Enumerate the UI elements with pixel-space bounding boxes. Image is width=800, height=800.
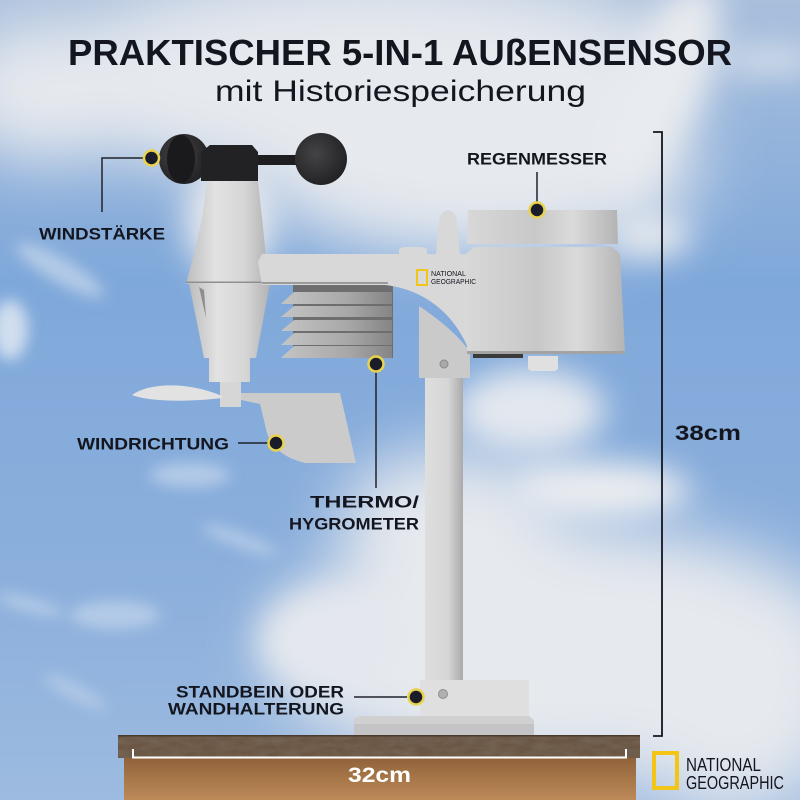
callout: Standbein oder Wandhalterung: WANDHALTERUNG <box>168 700 344 718</box>
support arm <box>258 254 484 378</box>
callout: Windrichtung <box>77 436 284 454</box>
bolt and sensor post <box>399 210 460 254</box>
callout: Regenmesser: REGENMESSER <box>467 150 607 168</box>
rain gauge body <box>466 247 625 371</box>
rain gauge cap <box>467 210 618 244</box>
mounting pole <box>425 376 463 682</box>
National Geographic logo <box>654 753 784 793</box>
callout: Windstärke <box>39 150 165 244</box>
product logo: NATIONAL <box>431 269 466 278</box>
callout: Standbein oder Wandhalterung <box>168 684 424 718</box>
callout: Standbein oder Wandhalterung: STANDBEIN ODER <box>176 684 344 702</box>
product logo: GEOGRAPHIC <box>431 277 476 286</box>
height dimension 38cm: 38cm <box>675 422 741 445</box>
weather station product <box>132 133 625 735</box>
wind vane body <box>186 181 270 407</box>
callout: Thermo/Hygrometer <box>289 356 420 534</box>
width dimension 32cm <box>133 749 626 787</box>
wall with brown top <box>118 735 640 800</box>
wind vane fin <box>132 385 356 463</box>
product logo <box>417 269 476 286</box>
callout: Thermo/Hygrometer: HYGROMETER <box>289 516 419 534</box>
callout: Windstärke: WINDSTÄRKE <box>39 226 165 244</box>
callout: Regenmesser <box>467 150 607 218</box>
subtitle: mit Historiespeicherung <box>215 75 586 108</box>
wind sensor cups and hub <box>159 133 347 185</box>
title: PRAKTISCHER 5-IN-1 AUßENSENSOR <box>68 32 732 73</box>
callout: Windrichtung: WINDRICHTUNG <box>77 436 229 454</box>
thermo hygrometer louvres <box>281 282 393 358</box>
width dimension 32cm: 32cm <box>348 764 411 787</box>
callout: Thermo/Hygrometer: THERMO/ <box>310 494 420 512</box>
base bracket <box>354 680 534 735</box>
National Geographic logo: NATIONAL <box>686 755 761 775</box>
height dimension 38cm <box>653 132 741 736</box>
